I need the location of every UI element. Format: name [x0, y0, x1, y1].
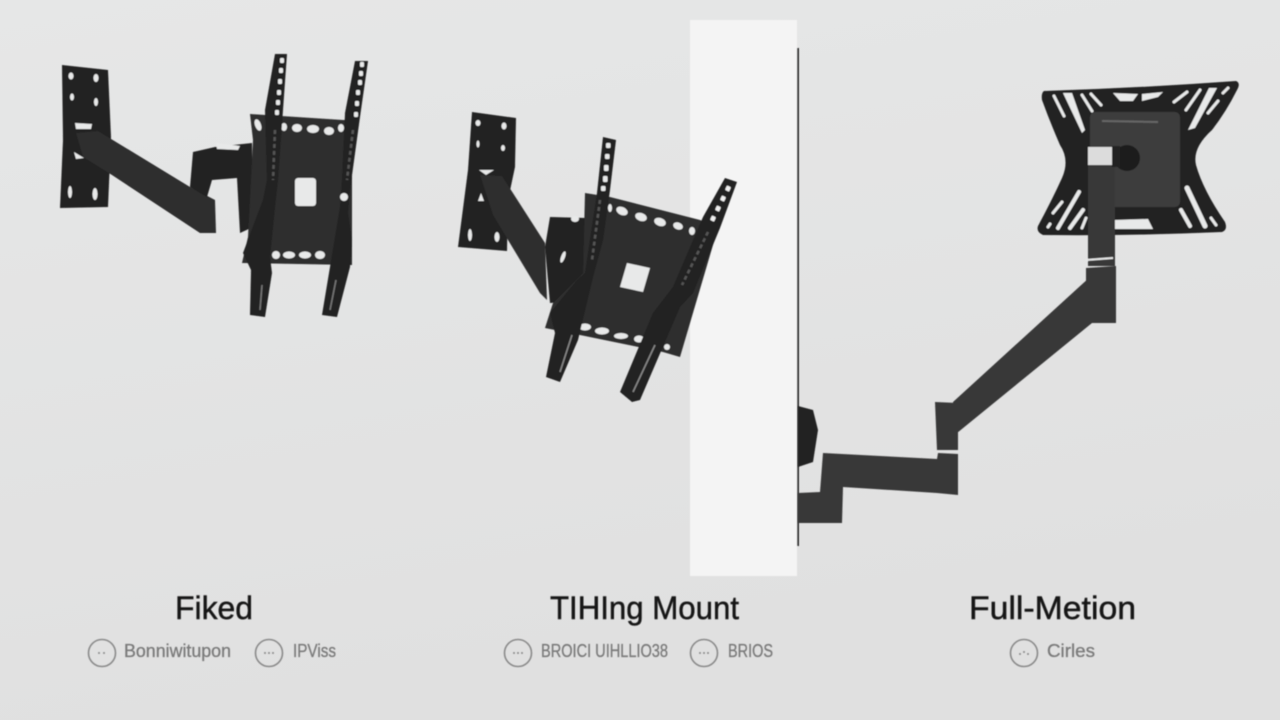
- feature: first: BROICI UIHLLIO38: [541, 641, 668, 661]
- mount: fixed: [60, 54, 368, 317]
- white wall panel: [690, 20, 799, 576]
- mount: tilting: [458, 112, 737, 402]
- upper arm: [953, 277, 1092, 433]
- monitor plate: [1038, 81, 1239, 235]
- arm highlight: [479, 170, 494, 175]
- feature: second: [690, 640, 773, 666]
- feature: first: Cirles: [1047, 641, 1095, 661]
- swing arm: [76, 131, 216, 233]
- heading: tilting mount: TIHIng Mount: [550, 590, 739, 626]
- heading: fixed: Fiked: [175, 590, 253, 626]
- label: tilting mount: [504, 590, 773, 666]
- feature: second: [256, 640, 336, 666]
- feature: first: [1010, 640, 1095, 666]
- feature: second: BRIOS: [728, 641, 773, 661]
- feature: first: Bonniwitupon: [124, 641, 231, 661]
- upper elbow: [935, 402, 958, 450]
- swing arm: [480, 175, 547, 300]
- elbow bracket: [190, 143, 253, 233]
- wall plate: [60, 65, 111, 208]
- arm highlight: [75, 123, 92, 129]
- label: full-motion: [969, 590, 1136, 666]
- feature: first: [88, 640, 231, 666]
- center panel: [1090, 112, 1180, 207]
- feature: second: IPViss: [293, 641, 336, 661]
- mount: full-motion: [798, 81, 1239, 523]
- rails: [243, 54, 368, 317]
- lower arm: [798, 453, 958, 523]
- rails: [546, 137, 737, 402]
- back plate: [242, 114, 352, 265]
- elbow bracket: [545, 216, 587, 303]
- column: [1086, 146, 1120, 323]
- label: fixed: [88, 590, 336, 666]
- back plate: [545, 193, 718, 357]
- wall knob: [798, 406, 818, 467]
- heading: full-motion: Full-Metion: [969, 590, 1136, 626]
- feature: first: [504, 640, 668, 666]
- wall plate: [458, 112, 516, 251]
